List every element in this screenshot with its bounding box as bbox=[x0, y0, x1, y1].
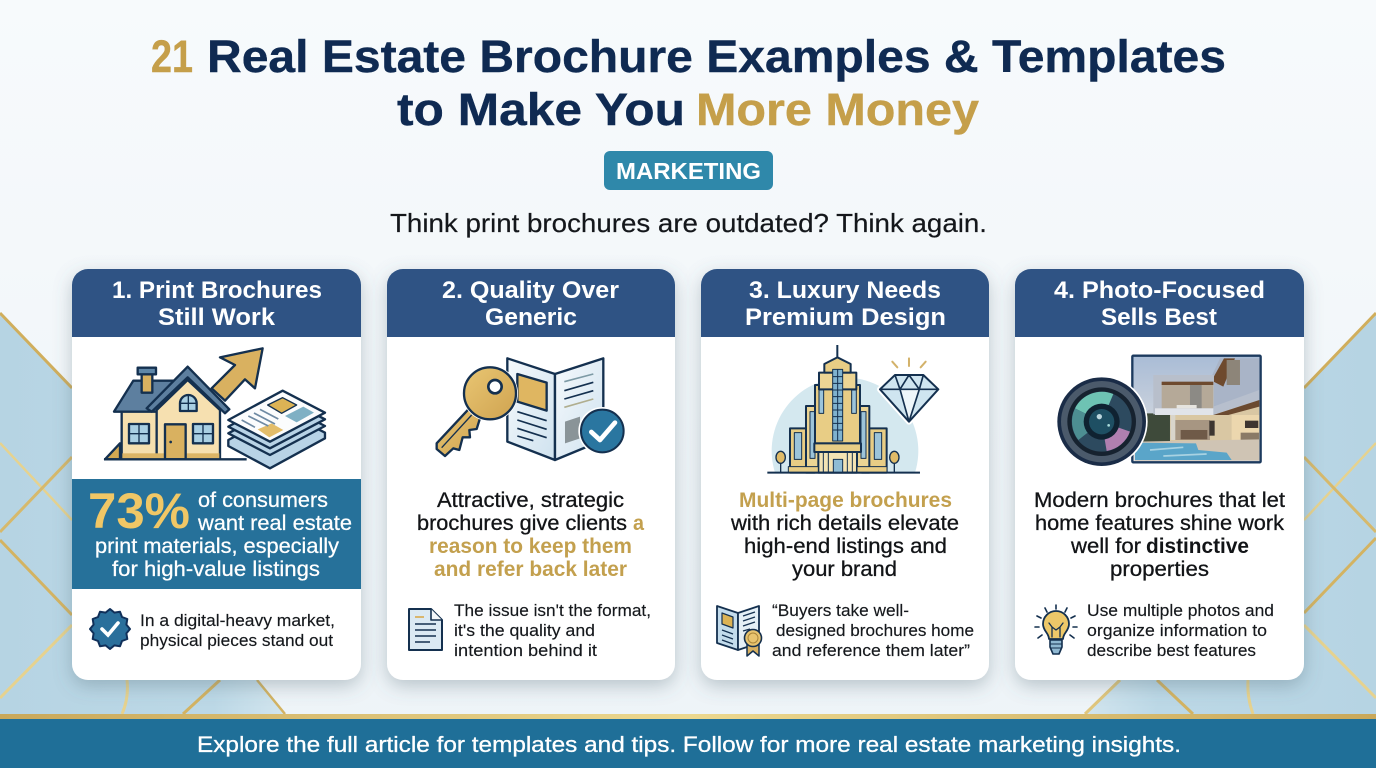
card 1 header: Still Work bbox=[158, 304, 275, 331]
card 3 note: designed brochures home bbox=[776, 621, 974, 640]
card 1 header: 1. Print Brochures bbox=[112, 277, 322, 304]
panel: card 3 luxury needs premium design bbox=[701, 269, 989, 680]
card 3 note: and reference them later” bbox=[772, 641, 970, 660]
card 3 body: with rich details elevate bbox=[730, 512, 959, 535]
background: left blue panel bbox=[0, 313, 285, 714]
statistic band: want real estate bbox=[197, 512, 352, 535]
icon: house with rising arrow and brochure stack bbox=[104, 348, 325, 468]
footer bar: Explore the full article for templates and tips. Follow for more real estate marketing insights. bbox=[197, 732, 1181, 757]
panel: card 1 print brochures still work bbox=[72, 269, 361, 680]
card 4 note bbox=[1087, 601, 1274, 660]
card 2 header: 2. Quality Over bbox=[442, 277, 619, 304]
card 3 note bbox=[772, 601, 974, 660]
statistic band: 73% bbox=[88, 483, 190, 539]
card 2 body: Attractive, strategic bbox=[437, 489, 624, 512]
icon: key, brochure and check bbox=[437, 358, 626, 460]
card 2 body: and refer back later bbox=[434, 558, 627, 581]
card 4 body: properties bbox=[1110, 558, 1209, 581]
icon: camera lens and house photo bbox=[1056, 356, 1261, 468]
title: More Money bbox=[696, 84, 979, 135]
card 2 note: intention behind it bbox=[454, 641, 597, 660]
card 2 note: The issue isn't the format, bbox=[454, 601, 651, 620]
card 1 note: In a digital-heavy market, bbox=[140, 611, 335, 630]
card 3 header: 3. Luxury Needs bbox=[749, 277, 941, 304]
card 4 body: home features shine work bbox=[1035, 512, 1285, 535]
category badge bbox=[604, 151, 773, 190]
card 3 body: high-end listings and bbox=[744, 535, 947, 558]
statistic band: for high-value listings bbox=[112, 558, 320, 581]
card 3 header: Premium Design bbox=[745, 304, 946, 331]
icon: light bulb bbox=[1035, 605, 1077, 654]
background: right blue panel bbox=[1085, 313, 1376, 714]
icon: luxury tower and diamond bbox=[767, 345, 938, 473]
statistic band bbox=[72, 479, 361, 589]
card 3 body: Multi-page brochures bbox=[739, 489, 952, 512]
card 4 note: organize information to bbox=[1087, 621, 1267, 640]
card 4 body bbox=[1034, 489, 1285, 581]
card 2 body bbox=[417, 489, 644, 581]
panel: card 4 photo-focused sells best bbox=[1015, 269, 1304, 680]
icon: booklet with medal bbox=[717, 606, 762, 656]
subtitle: Think print brochures are outdated? Think again. bbox=[390, 208, 987, 238]
category badge: MARKETING bbox=[616, 158, 761, 184]
title: to Make You bbox=[397, 84, 685, 135]
card 4 note: Use multiple photos and bbox=[1087, 601, 1274, 620]
title: 21 bbox=[151, 31, 193, 82]
card 4 header: 4. Photo-Focused bbox=[1054, 277, 1265, 304]
card 2 body: reason to keep them bbox=[429, 535, 632, 558]
card 4 header: Sells Best bbox=[1101, 304, 1217, 331]
card 4 header bbox=[1015, 269, 1304, 337]
card 2 header bbox=[387, 269, 675, 337]
card 1 note bbox=[140, 611, 335, 650]
card 3 body bbox=[730, 489, 959, 581]
card 2 note bbox=[454, 601, 651, 660]
panel: card 2 quality over generic bbox=[387, 269, 675, 680]
card 1 header bbox=[72, 269, 361, 337]
photo of modern house bbox=[1132, 356, 1261, 462]
camera lens bbox=[1056, 376, 1148, 468]
title bbox=[151, 31, 1226, 135]
statistic band: print materials, especially bbox=[95, 535, 340, 558]
card 3 header bbox=[701, 269, 989, 337]
card 2 body: brochures give clients bbox=[417, 512, 627, 535]
icon: document bbox=[409, 609, 442, 650]
card 2 note: it's the quality and bbox=[454, 621, 595, 640]
card 1 note: physical pieces stand out bbox=[140, 631, 333, 650]
title: Real Estate Brochure Examples & Templates bbox=[207, 31, 1226, 82]
card 2 header: Generic bbox=[485, 304, 577, 331]
footer bar bbox=[0, 714, 1376, 768]
statistic band: of consumers bbox=[198, 489, 328, 512]
card 4 body: well for bbox=[1070, 535, 1141, 558]
card 4 body: Modern brochures that let bbox=[1034, 489, 1285, 512]
card 3 note: “Buyers take well- bbox=[772, 601, 909, 620]
card 2 body: a bbox=[633, 512, 644, 535]
card 4 note: describe best features bbox=[1087, 641, 1256, 660]
icon: check badge bbox=[90, 609, 130, 649]
card 4 body: distinctive bbox=[1146, 535, 1249, 558]
card 3 body: your brand bbox=[792, 558, 897, 581]
